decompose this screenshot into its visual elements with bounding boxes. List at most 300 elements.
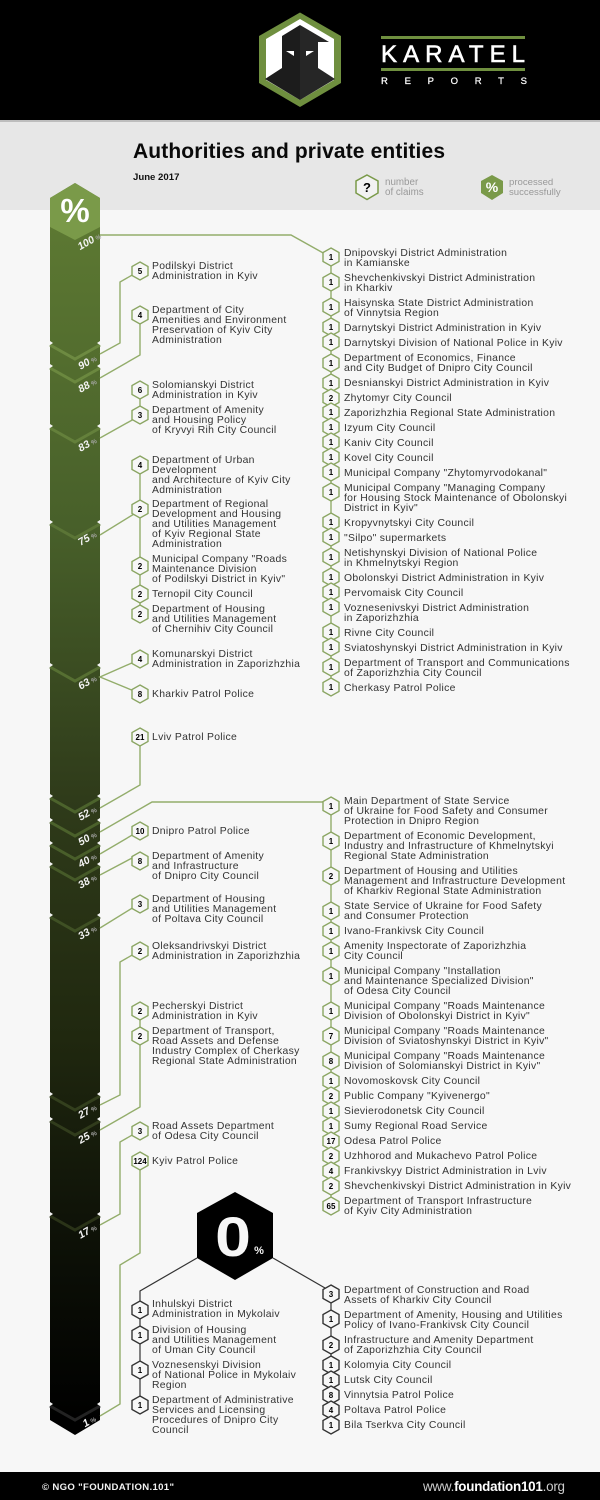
item: Kaniv — [323, 433, 434, 451]
item: Odesa Road Assets: Road Assets Department — [152, 1121, 274, 1132]
item: Installation Odesa: and Maintenance Specialized Division" — [344, 976, 534, 987]
item: Darnytskyi Admin: 1 — [329, 323, 334, 332]
item: Poltava Patrol: Poltava Patrol Police — [344, 1405, 446, 1416]
item: Haisynska: Haisynska State District Administration — [344, 298, 534, 309]
item: Pecherskyi: Pecherskyi District — [152, 1001, 243, 1012]
item: Kharkiv Construction: Assets of Kharkiv City Council — [344, 1295, 492, 1306]
connector lines: black zero group — [140, 1258, 331, 1425]
item: Transport Infrastructure Kyiv: Department of Transport Infrastructure — [344, 1196, 532, 1207]
percent labels: 38 % — [76, 871, 99, 891]
header band — [0, 0, 600, 210]
item: Kolomyia: Kolomyia City Council — [344, 1360, 451, 1371]
item: Cherkasy Transport: Regional State Administration — [152, 1056, 297, 1067]
bar chart: percentage column — [50, 183, 104, 1435]
item: Shevchenkivskyi Kharkiv: 1 — [329, 278, 334, 287]
item: Pecherskyi: Administration in Kyiv — [152, 1011, 258, 1022]
item: Zaporizhzhia Infrastructure: 2 — [329, 1341, 334, 1350]
item: Installation Odesa: of Odesa City Council — [344, 986, 451, 997]
item: Kyiv Patrol: 124 — [133, 1157, 147, 1166]
item: Vinnytsia Patrol — [323, 1386, 454, 1404]
item: Lviv Patrol: 21 — [136, 733, 145, 742]
item: Komunarskyi: 4 — [138, 655, 143, 664]
item: Inhulskyi: Inhulskyi District — [152, 1299, 232, 1310]
item: Lutsk — [323, 1371, 433, 1389]
item: Solomianskyi: Administration in Kyiv — [152, 390, 258, 401]
item: Novomoskovsk: 1 — [329, 1077, 334, 1086]
item: Roads Podilskyi — [132, 554, 287, 585]
item: Khmelnytskyi Economic: Industry and Infrastructure of Khmelnytskyi — [344, 841, 554, 852]
item: Zaporizhzhia Infrastructure — [323, 1335, 534, 1356]
item: Kryvyi Rih: and Housing Policy — [152, 415, 247, 426]
item: Cherkasy Transport: Road Assets and Defense — [152, 1036, 279, 1047]
item: Managing Company: 1 — [329, 488, 334, 497]
item: Desnianskyi: Desnianskyi District Administration in Kyiv — [344, 378, 550, 389]
item: Kryvyi Rih: of Kryvyi Rih City Council — [152, 425, 276, 436]
item: Oleksandrivskyi: Administration in Zaporizhzhia — [152, 951, 300, 962]
item: Dnipro Amenity — [132, 851, 264, 882]
item: Kropyvnytskyi: Kropyvnytskyi City Council — [344, 518, 474, 529]
item: Ternopil: 2 — [138, 590, 143, 599]
item: Poltava Housing: and Utilities Management — [152, 904, 276, 915]
item: Food Safety Dnipro: Protection in Dnipro Region — [344, 816, 479, 827]
item: Sievierodonetsk — [323, 1102, 485, 1120]
item: Zaporizhzhia RSA: 1 — [329, 408, 334, 417]
item: Urban Development: Administration — [152, 485, 222, 496]
item: Voznesensky — [132, 1360, 297, 1391]
item: Managing Company — [323, 483, 567, 514]
item: Kyivenergo — [323, 1087, 490, 1105]
item: Roads Podilskyi: Municipal Company "Roads — [152, 554, 287, 565]
item: Dnipro Patrol: 10 — [136, 827, 145, 836]
item: Uman: 1 — [138, 1331, 143, 1340]
item: Amenity Inspectorate — [323, 941, 526, 962]
item: Khmelnytskyi Economic: Department of Economic Development, — [344, 831, 536, 842]
item: Vinnytsia Patrol: 8 — [329, 1391, 334, 1400]
legend: number of claims: of claims — [385, 187, 424, 198]
item: State Service Food Safety: and Consumer Protection — [344, 911, 469, 922]
item: Urban Development: and Architecture of Kyiv City — [152, 475, 291, 486]
item: Bila Tserkva: Bila Tserkva City Council — [344, 1420, 466, 1431]
item: Odesa Road Assets — [132, 1121, 274, 1142]
item: Komunarskyi: Komunarskyi District — [152, 649, 253, 660]
item: Roads Solomianskyi: 8 — [329, 1057, 334, 1066]
item: Transport Infrastructure Kyiv — [323, 1196, 532, 1217]
logo wordmark: KARATEL — [381, 41, 525, 68]
item: Transport Zaporizhzhia: Department of Transport and Communications — [344, 658, 570, 669]
item: Roads Sviatoshynskyi — [323, 1026, 549, 1047]
percent labels: 90 % — [76, 352, 99, 372]
item: Solomianskyi: 6 — [138, 386, 143, 395]
item: Obolonskyi: Obolonskyi District Administration in Kyiv — [344, 573, 545, 584]
item: Voznesenivskyi: Voznesenivskyi District Administration — [344, 603, 529, 614]
item: Dnipro Amenity: 8 — [138, 857, 143, 866]
item: Lviv Patrol: Lviv Patrol Police — [152, 732, 237, 743]
footer: © NGO "FOUNDATION.101" — [42, 1482, 174, 1493]
item: Food Safety Dnipro — [323, 796, 548, 827]
item: Voznesensky: of National Police in Mykolaiv — [152, 1370, 297, 1381]
item: Dnipro Amenity: of Dnipro City Council — [152, 871, 259, 882]
item: Dnipro Amenity: and Infrastructure — [152, 861, 239, 872]
item: Netishynskyi: 1 — [329, 553, 334, 562]
item: Poltava Housing — [132, 894, 276, 925]
item: Kovel — [323, 448, 434, 466]
item: Kharkiv Construction — [323, 1285, 530, 1306]
item: Regional Development: Department of Regional — [152, 499, 268, 510]
item: Pecherskyi: 2 — [138, 1007, 143, 1016]
item: Rivne: Rivne City Council — [344, 628, 434, 639]
item: Installation Odesa: 1 — [329, 972, 334, 981]
item: Odesa Road Assets: of Odesa City Council — [152, 1131, 259, 1142]
percent labels: 63 % — [76, 672, 99, 692]
item: Oleksandrivskyi: Oleksandrivskyi District — [152, 941, 267, 952]
item: Cherkasy Patrol — [323, 678, 456, 696]
item: Netishynskyi — [323, 548, 537, 569]
item: Haisynska: 1 — [329, 303, 334, 312]
item: Kyiv Patrol — [132, 1152, 238, 1170]
item: Dnipro Administrative: 1 — [138, 1401, 143, 1410]
item: Zhytomyr — [323, 389, 452, 407]
item: Zhytomyrvodokanal — [323, 463, 547, 481]
item: Economics Dnipro — [323, 353, 533, 374]
item: Kyivenergo: 2 — [329, 1092, 334, 1101]
item: Kharkiv Construction: Department of Construction and Road — [344, 1285, 530, 1296]
item: Rivne — [323, 623, 434, 641]
item: Frankivskyy: Frankivskyy District Administration in Lviv — [344, 1166, 547, 1177]
item: Kovel: Kovel City Council — [344, 453, 434, 464]
item: Rivne: 1 — [329, 628, 334, 637]
item: Kharkiv Patrol: 8 — [138, 690, 143, 699]
item: Installation Odesa: Municipal Company "Installation — [344, 966, 501, 977]
item: Vinnytsia Patrol: Vinnytsia Patrol Police — [344, 1390, 454, 1401]
item: Ivano-Frankivsk Amenity: Department of Amenity, Housing and Utilities — [344, 1310, 563, 1321]
item: Inhulskyi: 1 — [138, 1306, 143, 1315]
item: Silpo: "Silpo" supermarkets — [344, 533, 446, 544]
item: Chernihiv: 2 — [138, 610, 143, 619]
item: Chernihiv: of Chernihiv City Council — [152, 624, 273, 635]
item: Ivano-Frankivsk Amenity: 1 — [329, 1315, 334, 1324]
item: Kyivenergo: Public Company "Kyivenergo" — [344, 1091, 490, 1102]
item: Novomoskovsk: Novomoskovsk City Council — [344, 1076, 480, 1087]
item: Ivano-Frankivsk: Ivano-Frankivsk City Council — [344, 926, 484, 937]
percent labels: 17 % — [76, 1221, 99, 1241]
item: Solomianskyi — [132, 380, 258, 401]
footer: www.foundation101.org — [422, 1479, 565, 1494]
item: Ivano-Frankivsk: 1 — [329, 927, 334, 936]
item: Economics Dnipro: Department of Economics, Finance — [344, 353, 516, 364]
item: Sviatoshynskyi — [323, 638, 563, 656]
item: Amenity Inspectorate: Amenity Inspectorate of Zaporizhzhia — [344, 941, 526, 952]
item: Inhulskyi — [132, 1299, 280, 1320]
title: Authorities and private entities — [133, 140, 445, 163]
item: Khmelnytskyi Economic: 1 — [329, 837, 334, 846]
percent labels — [75, 230, 104, 1430]
item: Voznesensky: Voznesenskyi Division — [152, 1360, 261, 1371]
item: Uman: and Utilities Management — [152, 1335, 276, 1346]
item: Kyiv Patrol: Kyiv Patrol Police — [152, 1156, 238, 1167]
legend: processed successfully: successfully — [509, 187, 561, 198]
item: Komunarskyi — [132, 649, 300, 670]
item: Kryvyi Rih — [132, 405, 276, 436]
item: Darnytskyi Police: 1 — [329, 338, 334, 347]
item: Sievierodonetsk: 1 — [329, 1107, 334, 1116]
item: Zhytomyr: 2 — [329, 394, 334, 403]
percent labels: 52 % — [76, 803, 99, 823]
item: Roads Obolonskyi: 1 — [329, 1007, 334, 1016]
legend: number of claims — [356, 175, 424, 200]
item: Roads Solomianskyi: Division of Solomianskyi District in Kyiv" — [344, 1061, 540, 1072]
legend: processed successfully — [481, 175, 561, 200]
item: Podilskyi — [132, 261, 258, 282]
item: Dnipro Administrative: Services and Licensing — [152, 1405, 265, 1416]
item: Roads Sviatoshynskyi: Municipal Company "Roads Maintenance — [344, 1026, 545, 1037]
item: Frankivskyy — [323, 1162, 547, 1180]
item: Novomoskovsk — [323, 1072, 480, 1090]
bar chart: percentage column: % — [60, 192, 90, 229]
item: Roads Podilskyi: 2 — [138, 562, 143, 571]
item: Urban Development — [132, 455, 291, 496]
item: Darnytskyi Admin: Darnytskyi District Administration in Kyiv — [344, 323, 542, 334]
item: Cherkasy Transport: 2 — [138, 1032, 143, 1041]
item: Dnipro Administrative: Department of Administrative — [152, 1395, 294, 1406]
item: Voznesensky: Region — [152, 1380, 187, 1391]
item: Poltava Housing: 3 — [138, 900, 143, 909]
item: Kharkiv Housing: of Kharkiv Regional State Administration — [344, 886, 541, 897]
item: Pervomaisk: 1 — [329, 588, 334, 597]
list: right column, zero percent group — [323, 1285, 563, 1434]
item: Kharkiv Housing — [323, 866, 565, 897]
item: Cherkasy Patrol: 1 — [329, 683, 334, 692]
item: Voznesenivskyi: in Zaporizhzhia — [344, 613, 419, 624]
percent labels: 50 % — [76, 828, 99, 848]
item: Kharkiv Patrol: Kharkiv Patrol Police — [152, 689, 254, 700]
item: Lviv Patrol — [132, 728, 237, 746]
item: Roads Podilskyi: Maintenance Division — [152, 564, 257, 575]
item: Podilskyi: Administration in Kyiv — [152, 271, 258, 282]
item: Urban Development: Department of Urban — [152, 455, 255, 466]
item: Chernihiv: Department of Housing — [152, 604, 265, 615]
item: Poltava Housing: Department of Housing — [152, 894, 265, 905]
item: City Amenities: Amenities and Environment — [152, 315, 287, 326]
item: Ternopil — [132, 585, 253, 603]
item: Obolonskyi: 1 — [329, 573, 334, 582]
item: Transport Zaporizhzhia — [323, 658, 570, 679]
item: Pervomaisk — [323, 583, 464, 601]
item: Roads Sviatoshynskyi: 7 — [329, 1032, 334, 1041]
item: Dnipovskyi: Dnipovskyi District Administration — [344, 248, 507, 259]
item: Dnipovskyi: 1 — [329, 253, 334, 262]
item: Cherkasy Transport — [132, 1026, 300, 1067]
item: Kovel: 1 — [329, 453, 334, 462]
item: City Amenities — [132, 305, 287, 346]
item: Food Safety Dnipro: Main Department of State Service — [344, 796, 510, 807]
list: right column, 50 percent group — [323, 796, 572, 1217]
item: Shevchenkivskyi Kyiv: Shevchenkivskyi District Administration in Kyiv — [344, 1181, 572, 1192]
item: Sievierodonetsk: Sievierodonetsk City Council — [344, 1106, 485, 1117]
item: Amenity Inspectorate: 1 — [329, 947, 334, 956]
item: Kolomyia: 1 — [329, 1361, 334, 1370]
item: Kropyvnytskyi: 1 — [329, 518, 334, 527]
item: Kryvyi Rih: 3 — [138, 411, 143, 420]
item: Podilskyi: Podilskyi District — [152, 261, 233, 272]
item: Zaporizhzhia Infrastructure: of Zaporizhzhia City Council — [344, 1345, 482, 1356]
item: Desnianskyi — [323, 374, 550, 392]
item: Food Safety Dnipro: of Ukraine for Food Safety and Consumer — [344, 806, 548, 817]
item: State Service Food Safety: 1 — [329, 907, 334, 916]
item: Poltava Patrol: 4 — [329, 1406, 334, 1415]
item: Zhytomyrvodokanal: 1 — [329, 468, 334, 477]
item: City Amenities: 4 — [138, 311, 143, 320]
item: Kharkiv Housing: Department of Housing and Utilities — [344, 866, 518, 877]
item: Dnipro Patrol: Dnipro Patrol Police — [152, 826, 250, 837]
item: Economics Dnipro: 1 — [329, 359, 334, 368]
item: Uman: Division of Housing — [152, 1325, 247, 1336]
item: Managing Company: Municipal Company "Managing Company — [344, 483, 545, 494]
item: Shevchenkivskyi Kyiv — [323, 1177, 572, 1195]
item: Zhytomyrvodokanal: Municipal Company "Zhytomyrvodokanal" — [344, 468, 547, 479]
item: Inhulskyi: Administration in Mykolaiv — [152, 1309, 280, 1320]
item: Food Safety Dnipro: 1 — [329, 802, 334, 811]
item: Komunarskyi: Administration in Zaporizhzhia — [152, 659, 300, 670]
item: Sviatoshynskyi: Sviatoshynskyi District Administration in Kyiv — [344, 643, 563, 654]
item: Kharkiv Housing: 2 — [329, 872, 334, 881]
item: Kharkiv Patrol — [132, 685, 254, 703]
logo wordmark — [381, 36, 527, 87]
item: Kaniv: Kaniv City Council — [344, 438, 434, 449]
item: Amenity Inspectorate: City Council — [344, 951, 403, 962]
item: Sviatoshynskyi: 1 — [329, 643, 334, 652]
item: Bila Tserkva: 1 — [329, 1421, 334, 1430]
item: City Amenities: Preservation of Kyiv City — [152, 325, 273, 336]
item: Regional Development: Administration — [152, 539, 222, 550]
item: Lutsk: 1 — [329, 1376, 334, 1385]
item: Darnytskyi Police — [323, 333, 563, 351]
item: Managing Company: for Housing Stock Maintenance of Obolonskyi — [344, 493, 567, 504]
item: Netishynskyi: Netishynskyi Division of National Police — [344, 548, 537, 559]
item: Uzhhorod: 2 — [329, 1152, 334, 1161]
item: Solomianskyi: Solomianskyi District — [152, 380, 254, 391]
item: Urban Development: Development — [152, 465, 217, 476]
item: Transport Zaporizhzhia: 1 — [329, 663, 334, 672]
item: Kolomyia — [323, 1356, 451, 1374]
item: Haisynska — [323, 298, 534, 319]
item: Khmelnytskyi Economic — [323, 831, 554, 862]
item: Regional Development: 2 — [138, 505, 143, 514]
item: Kaniv: 1 — [329, 438, 334, 447]
item: Regional Development: and Utilities Management — [152, 519, 276, 530]
item: Roads Sviatoshynskyi: Division of Sviatoshynskyi District in Kyiv" — [344, 1036, 549, 1047]
item: Silpo: 1 — [329, 533, 334, 542]
item: Ivano-Frankivsk — [323, 922, 484, 940]
item: Uman: of Uman City Council — [152, 1345, 256, 1356]
item: Roads Solomianskyi — [323, 1051, 545, 1072]
item: Kharkiv Housing: Management and Infrastructure Development — [344, 876, 565, 887]
item: Transport Zaporizhzhia: of Zaporizhzhia City Council — [344, 668, 482, 679]
item: Pecherskyi — [132, 1001, 258, 1022]
item: City Amenities: Department of City — [152, 305, 244, 316]
item: Netishynskyi: in Khmelnytskyi Region — [344, 558, 459, 569]
connector lines: green — [100, 235, 331, 1416]
item: Regional Development: Development and Housing — [152, 509, 281, 520]
item: Oleksandrivskyi — [132, 941, 300, 962]
item: Dnipro Administrative: Council — [152, 1425, 189, 1436]
item: Voznesensky: 1 — [138, 1366, 143, 1375]
item: Shevchenkivskyi Kharkiv — [323, 273, 535, 294]
percent labels: 40 % — [75, 850, 99, 871]
item: Shevchenkivskyi Kharkiv: Shevchenkivskyi District Administration — [344, 273, 535, 284]
item: Kharkiv Construction: 3 — [329, 1290, 334, 1299]
item: Regional Development: of Kyiv Regional State — [152, 529, 261, 540]
item: City Amenities: Administration — [152, 335, 222, 346]
item: Podilskyi: 5 — [138, 267, 143, 276]
item: Darnytskyi Admin — [323, 318, 542, 336]
item: Zaporizhzhia RSA — [323, 403, 555, 421]
item: Silpo — [323, 528, 446, 546]
percent labels: 88 % — [76, 375, 99, 395]
item: Transport Infrastructure Kyiv: of Kyiv City Administration — [344, 1206, 472, 1217]
item: Uzhhorod: Uzhhorod and Mukachevo Patrol Police — [344, 1151, 537, 1162]
item: Transport Infrastructure Kyiv: 65 — [327, 1202, 336, 1211]
item: State Service Food Safety — [323, 901, 542, 922]
item: Lutsk: Lutsk City Council — [344, 1375, 433, 1386]
item: Desnianskyi: 1 — [329, 379, 334, 388]
item: Voznesenivskyi — [323, 598, 529, 624]
legend: processed successfully: processed — [509, 177, 553, 188]
legend: processed successfully: % — [486, 179, 499, 195]
item: Obolonskyi — [323, 568, 545, 586]
item: Urban Development: 4 — [138, 461, 143, 470]
item: Dnipro Administrative — [132, 1395, 294, 1436]
item: Roads Solomianskyi: Municipal Company "Roads Maintenance — [344, 1051, 545, 1062]
item: Izyum: 1 — [329, 423, 334, 432]
logo wordmark: REPORTS — [381, 76, 527, 87]
item: Odesa Patrol: 17 — [327, 1137, 336, 1146]
item: Roads Obolonskyi: Municipal Company "Roads Maintenance — [344, 1001, 545, 1012]
item: Sumy: Sumy Regional Road Service — [344, 1121, 488, 1132]
date: June 2017 — [133, 172, 179, 183]
zero percent hexagon: 0 — [215, 1205, 251, 1268]
item: Chernihiv — [132, 604, 276, 635]
item: Sumy: 1 — [329, 1122, 334, 1131]
item: Odesa Patrol — [323, 1132, 442, 1150]
item: Uzhhorod — [323, 1147, 537, 1165]
item: Ivano-Frankivsk Amenity: Policy of Ivano-Frankivsk City Council — [344, 1320, 529, 1331]
item: Roads Obolonskyi — [323, 1001, 545, 1022]
item: Economics Dnipro: and City Budget of Dnipro City Council — [344, 363, 533, 374]
item: Dnipro Amenity: Department of Amenity — [152, 851, 264, 862]
zero percent hexagon — [197, 1192, 273, 1280]
item: Zaporizhzhia Infrastructure: Infrastructure and Amenity Department — [344, 1335, 534, 1346]
item: Izyum: Izyum City Council — [344, 423, 435, 434]
legend: number of claims: ? — [363, 180, 371, 195]
item: Cherkasy Transport: Department of Transport, — [152, 1026, 275, 1037]
item: Shevchenkivskyi Kharkiv: in Kharkiv — [344, 283, 393, 294]
item: Khmelnytskyi Economic: Regional State Administration — [344, 851, 489, 862]
item: Roads Podilskyi: of Podilskyi District in Kyiv" — [152, 574, 285, 585]
item: Cherkasy Transport: Industry Complex of Cherkasy — [152, 1046, 300, 1057]
percent labels: 75 % — [76, 528, 99, 548]
item: Kropyvnytskyi — [323, 513, 474, 531]
legend: number of claims: number — [385, 177, 419, 188]
item: Oleksandrivskyi: 2 — [138, 947, 143, 956]
item: Poltava Housing: of Poltava City Council — [152, 914, 263, 925]
item: Poltava Patrol — [323, 1401, 446, 1419]
item: Zhytomyr: Zhytomyr City Council — [344, 393, 452, 404]
item: Managing Company: District in Kyiv" — [344, 503, 418, 514]
footer — [0, 1472, 600, 1500]
item: Bila Tserkva — [323, 1416, 466, 1434]
item: State Service Food Safety: State Service of Ukraine for Food Safety — [344, 901, 542, 912]
item: Uman — [132, 1325, 276, 1356]
